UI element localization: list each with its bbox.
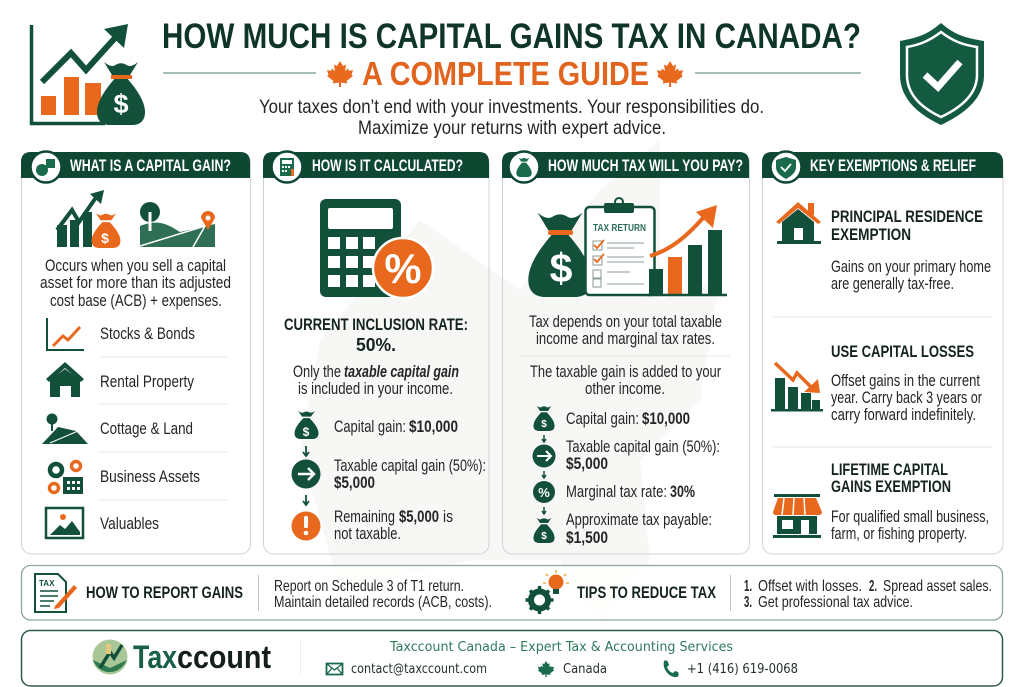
- icon: shield: [900, 23, 984, 125]
- item: business assets: [50, 462, 200, 494]
- exemption: capital losses: Offset gains in the current: [831, 372, 980, 390]
- icon: chart and bag: $: [101, 230, 109, 246]
- item: rental property: Rental Property: [100, 373, 195, 391]
- contact: location: [538, 661, 607, 677]
- tips to reduce tax: Offset with losses.: [758, 578, 862, 595]
- tips to reduce tax: 1.: [744, 578, 752, 595]
- step: capital gain: $: [541, 419, 547, 430]
- description: Tax depends on your total taxable: [529, 313, 722, 331]
- step: capital gain: Capital gain:: [566, 410, 639, 428]
- step: capital gain: $10,000: [409, 418, 458, 436]
- panel header: [21, 152, 250, 182]
- tips to reduce tax: Get professional tax advice.: [758, 594, 913, 611]
- arrow: [542, 471, 546, 478]
- exemption: capital losses: carry forward indefinitely.: [831, 406, 976, 424]
- step: capital gain: [294, 411, 458, 439]
- explanation: taxable capital gain: [344, 363, 459, 381]
- exemption: principal residence: are generally tax-free.: [831, 275, 954, 293]
- step: remaining: [292, 508, 453, 543]
- panel header: [762, 152, 1003, 182]
- icon: land with pin: [140, 202, 215, 247]
- step: tax payable: $1,500: [566, 529, 608, 547]
- company name: Taxccount Canada – Expert Tax & Accounting Services: [389, 639, 733, 655]
- icon: chart and bag: [57, 190, 120, 248]
- header icon: growth chart and money bag: $: [113, 89, 129, 119]
- tips to reduce tax: TIPS TO REDUCE TAX: [577, 583, 717, 602]
- contact: phone: [664, 660, 798, 677]
- step: marginal rate: 30%: [670, 483, 695, 501]
- step: marginal rate: %: [538, 485, 550, 500]
- explanation: other income.: [585, 380, 665, 398]
- exemption: capital losses: USE CAPITAL LOSSES: [831, 342, 974, 361]
- tips to reduce tax: 2.: [869, 578, 877, 595]
- how to report gains: [86, 575, 492, 611]
- exemption: lifetime capital gains: farm, or fishing property.: [831, 525, 967, 543]
- exemption: principal residence: PRINCIPAL RESIDENCE: [831, 207, 983, 226]
- logo: ccount: [177, 639, 271, 675]
- step: capital gain: [533, 406, 690, 431]
- intro text: Your taxes don’t end with your investments. Your responsibilities do.: [259, 96, 764, 118]
- panel header: HOW MUCH TAX WILL YOU PAY?: [548, 157, 743, 175]
- description: cost base (ACB) + expenses.: [50, 292, 222, 310]
- step: capital gain: $10,000: [642, 410, 690, 428]
- arrow: [303, 495, 309, 505]
- how to report gains: Report on Schedule 3 of T1 return.: [274, 578, 464, 595]
- icon: gear and lightbulb: [526, 570, 569, 614]
- step: capital gain: Capital gain:: [334, 418, 406, 436]
- exemption: principal residence: EXEMPTION: [831, 225, 911, 244]
- step: tax payable: $: [541, 531, 547, 542]
- step: remaining: is: [443, 508, 453, 526]
- step: taxable gain: $5,000: [566, 455, 608, 473]
- title: HOW MUCH IS CAPITAL GAINS TAX IN CANADA?: [162, 17, 861, 56]
- contact: location: Canada: [563, 661, 607, 677]
- panel header: HOW IS IT CALCULATED?: [312, 157, 463, 175]
- intro text: Maximize your returns with expert advice.: [358, 117, 666, 139]
- step: remaining: $5,000: [399, 508, 439, 526]
- panel header: [263, 152, 489, 182]
- panel: how is it calculated: [263, 152, 489, 554]
- how to report gains: HOW TO REPORT GAINS: [86, 583, 243, 602]
- strip: report and tips: [22, 566, 1002, 620]
- item: rental property: [46, 362, 195, 397]
- header icon: growth chart and money bag: [32, 24, 145, 125]
- icon: bag, tax return, rising bars: TAX RETURN: [593, 223, 646, 234]
- explanation: Only the: [293, 363, 341, 381]
- description: asset for more than its adjusted: [40, 274, 231, 292]
- subtitle: a complete guide: [163, 56, 861, 93]
- description: income and marginal tax rates.: [536, 330, 715, 348]
- panel: key exemptions and relief: [762, 152, 1003, 554]
- item: cottage and land: [42, 414, 193, 444]
- item: cottage and land: Cottage & Land: [100, 420, 193, 438]
- tips to reduce tax: 3.: [744, 594, 752, 611]
- item: stocks and bonds: Stocks & Bonds: [100, 325, 195, 343]
- exemption: capital losses: [771, 342, 982, 424]
- exemption: lifetime capital gains: GAINS EXEMPTION: [831, 477, 951, 496]
- step: tax payable: [533, 511, 712, 547]
- step: remaining: Remaining: [334, 508, 395, 526]
- step: taxable gain: $5,000: [334, 474, 375, 492]
- description: [40, 257, 231, 310]
- arrow: [542, 435, 546, 442]
- tips to reduce tax: [577, 575, 992, 611]
- footer: [22, 630, 1002, 686]
- item: valuables: [46, 508, 159, 538]
- how to report gains: Maintain detailed records (ACB, costs).: [274, 594, 492, 611]
- explanation: [293, 363, 459, 398]
- icon: tax document and pencil: TAX: [39, 579, 55, 588]
- intro text: [259, 96, 764, 139]
- icon: bag, tax return, rising bars: $: [550, 245, 573, 291]
- background watermark: [300, 140, 720, 620]
- step: taxable gain: Taxable capital gain (50%):: [334, 457, 486, 475]
- icon: bag, tax return, rising bars: [528, 198, 727, 297]
- exemption: lifetime capital gains: LIFETIME CAPITAL: [831, 460, 948, 479]
- description: Occurs when you sell a capital: [45, 257, 226, 275]
- icon: calculator with percent: %: [384, 245, 422, 292]
- step: remaining: not taxable.: [334, 525, 401, 543]
- exemption: capital losses: year. Carry back 3 years or: [831, 389, 982, 407]
- step: capital gain: $: [303, 425, 310, 439]
- step: taxable gain: [292, 457, 486, 492]
- step: marginal rate: [533, 481, 695, 503]
- panel header: WHAT IS A CAPITAL GAIN?: [70, 157, 231, 175]
- contact: email: contact@taxccount.com: [351, 661, 487, 677]
- tips to reduce tax: Spread asset sales.: [883, 578, 992, 595]
- icon: tax document and pencil: [35, 574, 77, 612]
- inclusion rate: [284, 315, 468, 355]
- explanation: [530, 363, 721, 398]
- explanation: The taxable gain is added to your: [530, 363, 721, 381]
- step: marginal rate: Marginal tax rate:: [566, 483, 667, 501]
- arrow: [542, 507, 546, 514]
- logo: [92, 639, 271, 675]
- description: [529, 313, 722, 348]
- subtitle: a complete guide: A COMPLETE GUIDE: [362, 56, 649, 93]
- item: business assets: Business Assets: [100, 468, 200, 486]
- panel: how much tax will you pay: [502, 152, 750, 554]
- exemption: principal residence: [776, 202, 991, 293]
- arrow: [303, 446, 309, 456]
- logo: Tax: [133, 639, 177, 675]
- panel: what is a capital gain: [21, 152, 250, 554]
- inclusion rate: CURRENT INCLUSION RATE:: [284, 315, 468, 334]
- step: taxable gain: Taxable capital gain (50%):: [566, 438, 720, 456]
- contact: phone: +1 (416) 619-0068: [687, 661, 798, 677]
- step: tax payable: Approximate tax payable:: [566, 511, 712, 529]
- icon: calculator with percent: [320, 199, 433, 298]
- item: valuables: Valuables: [100, 515, 159, 533]
- explanation: is included in your income.: [298, 380, 453, 398]
- step: taxable gain: [532, 438, 720, 473]
- panel header: [502, 152, 749, 182]
- inclusion rate: 50%.: [356, 335, 396, 355]
- exemption: lifetime capital gains: [773, 460, 989, 543]
- item: stocks and bonds: [47, 318, 195, 350]
